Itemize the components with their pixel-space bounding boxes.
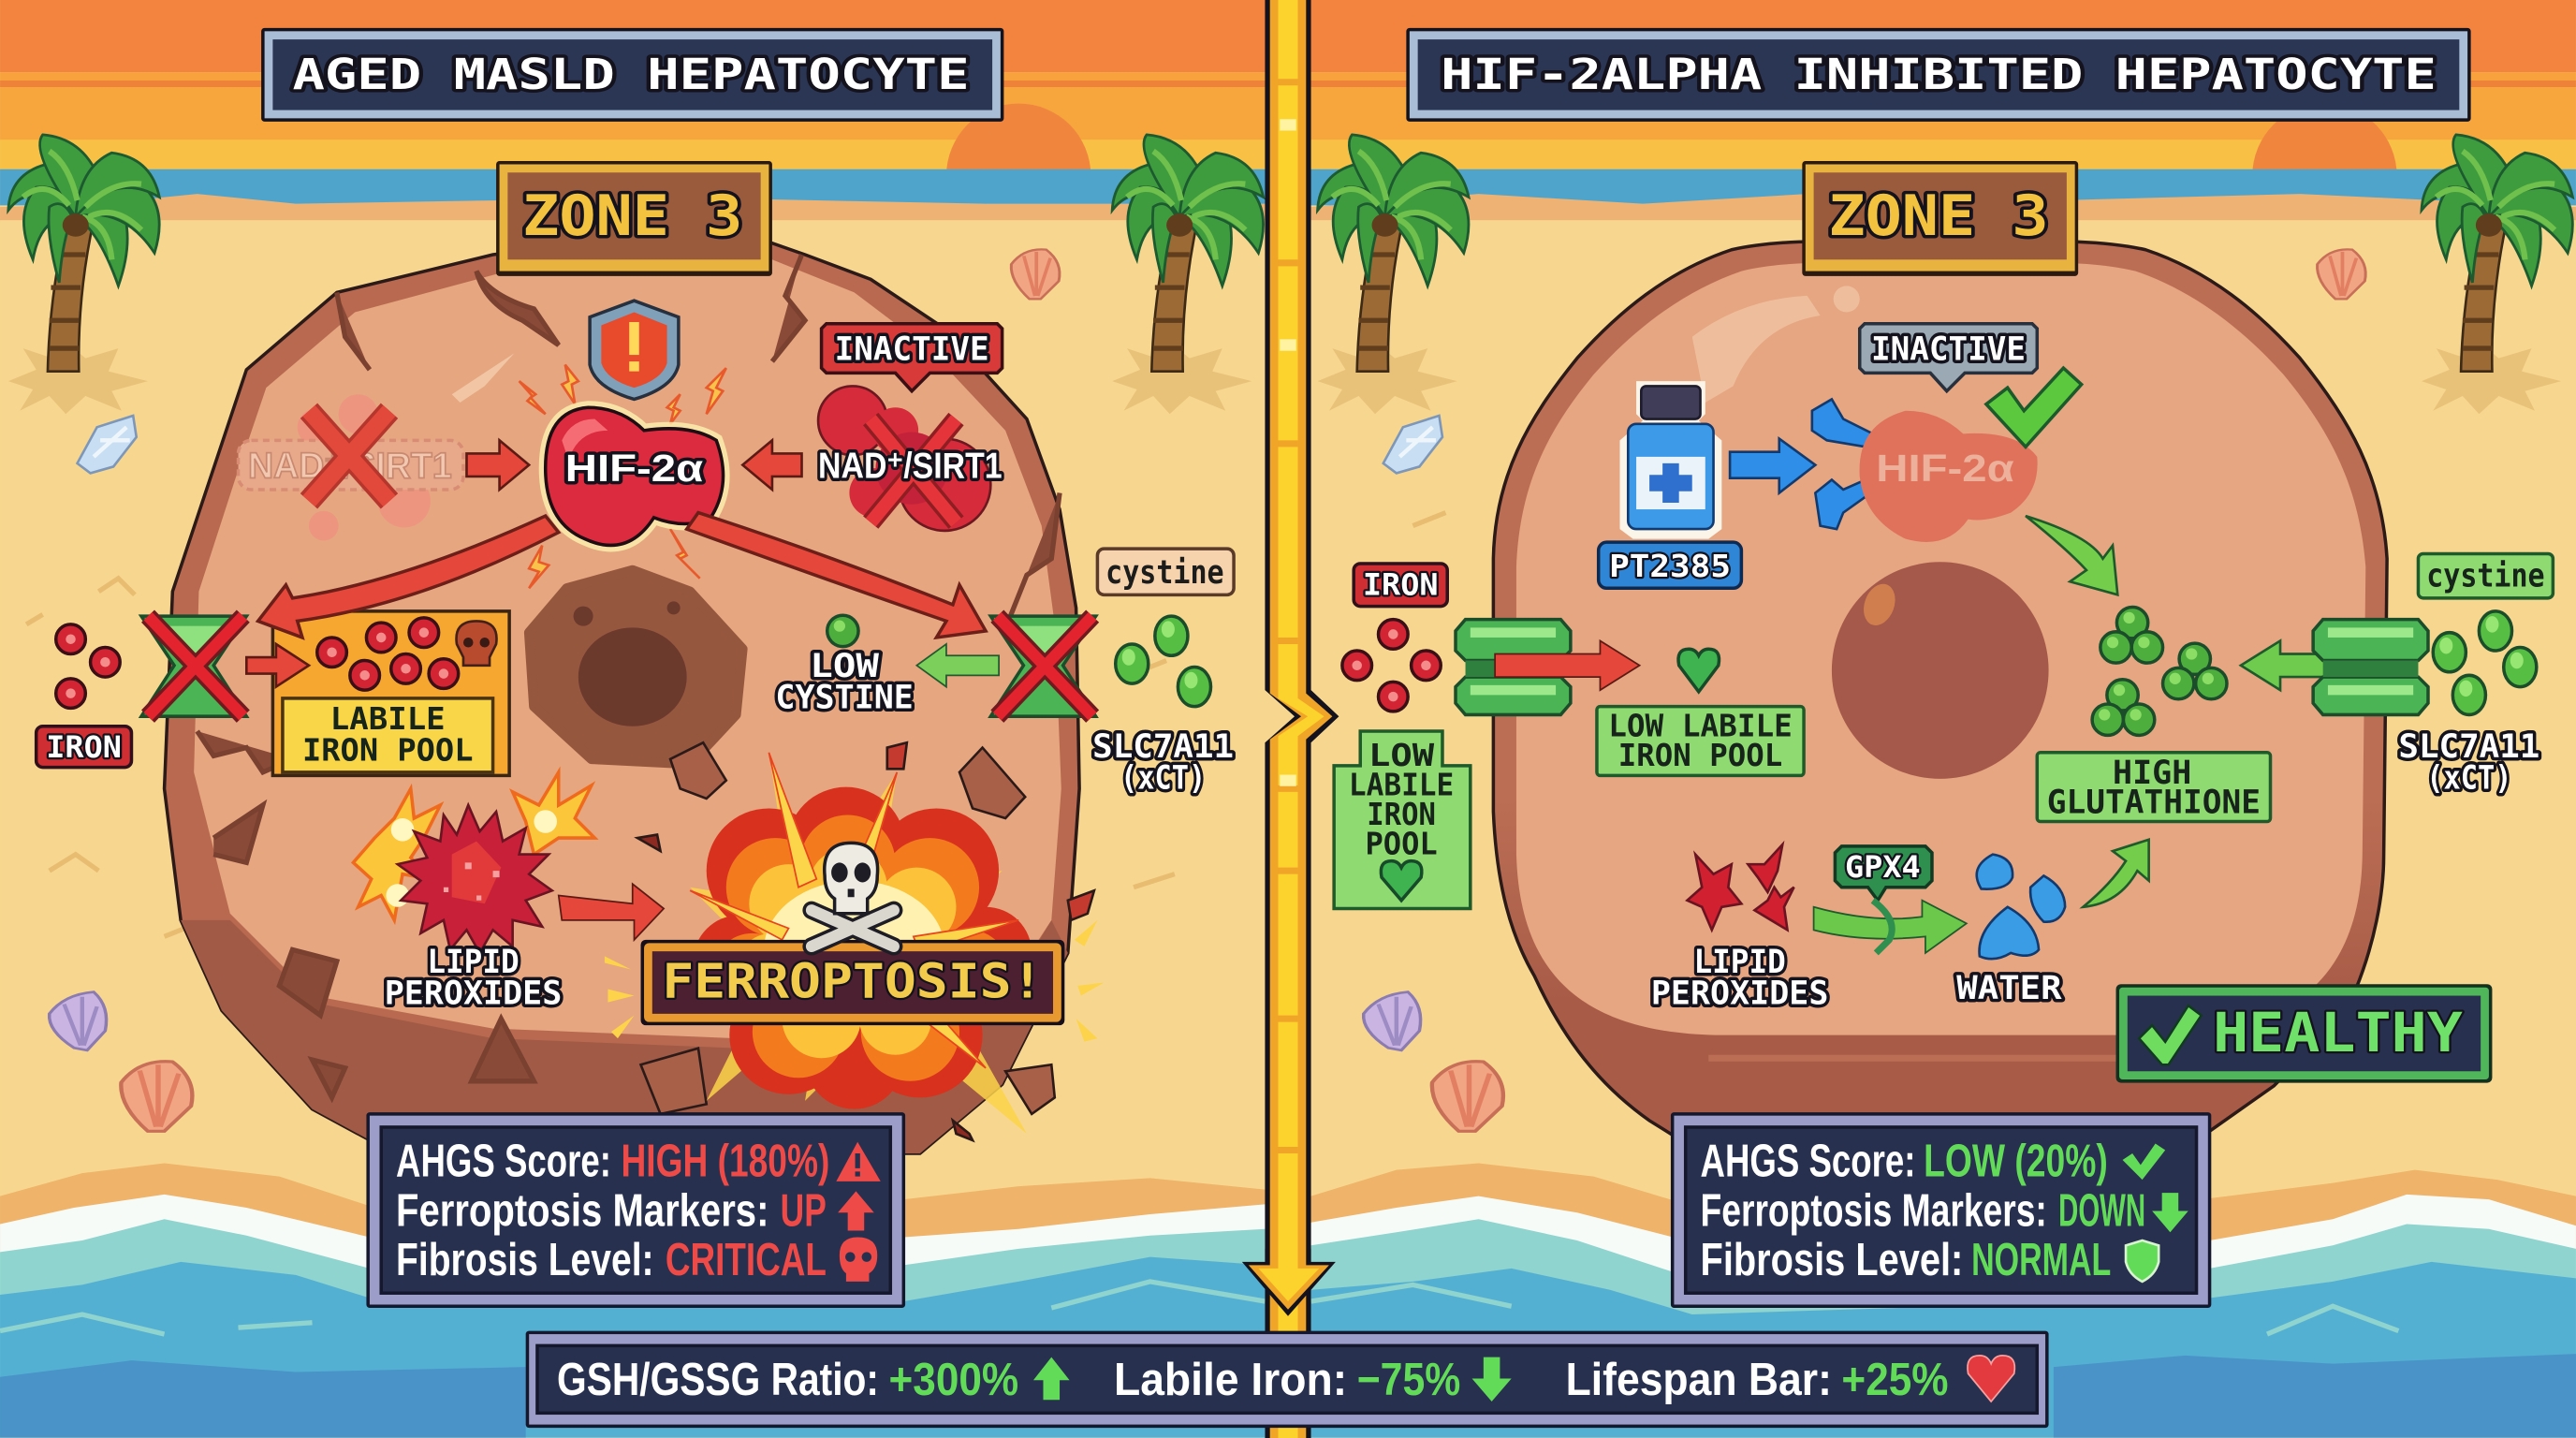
inhibitor fragments <box>1812 399 1873 529</box>
ghost NAD+/SIRT1: inactive <box>239 394 463 540</box>
labile iron pool panel: IRON POOL <box>302 732 474 769</box>
HIF-2 alpha active blob: HIF-2α <box>565 447 703 490</box>
arrow: cystine import <box>2241 640 2341 690</box>
arrow: HIF to cystine transporter <box>687 513 986 638</box>
arrow: iron into pool <box>246 644 309 687</box>
bottom summary bar: +25% <box>1841 1355 1949 1405</box>
LIPID PEROXIDES label left: LIPID <box>427 943 520 981</box>
LOW LABILE IRON POOL label <box>1597 707 1804 775</box>
palm tree far right <box>2422 135 2572 414</box>
healthy iron transporter <box>1456 620 1571 714</box>
left title banner <box>261 28 1003 122</box>
HIGH GLUTATHIONE label: GLUTATHIONE <box>2047 784 2261 822</box>
rocks debris <box>637 742 1094 1140</box>
bottom summary bar: −75% <box>1357 1355 1460 1405</box>
icon: red skull <box>840 1238 877 1282</box>
icon: down arrow green <box>2152 1193 2188 1232</box>
cell body: cracked membrane <box>165 238 1079 1153</box>
damaged nucleus <box>529 570 742 764</box>
left stats panel: UP <box>781 1185 827 1236</box>
panel: aged MASLD hepatocyte cell <box>37 238 1234 1153</box>
right stats panel: Ferroptosis Markers: <box>1701 1185 2047 1236</box>
icon: green heart <box>1678 649 1720 692</box>
water droplets <box>1977 855 2065 959</box>
HIF-2 alpha dimmed blob <box>1860 411 2038 542</box>
LOW LABILE IRON POOL label: LOW LABILE <box>1608 707 1793 743</box>
LOW LABILE IRON POOL label: IRON POOL <box>1618 737 1782 773</box>
ZONE 3 badge right: ZONE 3 <box>1828 184 2049 249</box>
SLC7A11 label <box>1092 727 1234 797</box>
bottom summary bar: Labile Iron: <box>1114 1355 1347 1405</box>
arrow: NAD+/SIRT1 to HIF <box>466 440 529 490</box>
GPX4 badge <box>1835 846 1932 953</box>
right stats panel <box>1671 1112 2211 1308</box>
right title banner <box>1406 28 2471 122</box>
IRON label right: IRON <box>1363 568 1439 602</box>
arrow: reduced iron import <box>1495 640 1640 690</box>
LIPID PEROXIDES label right: LIPID <box>1693 943 1786 981</box>
HIGH GLUTATHIONE label: HIGH <box>2113 754 2191 792</box>
side panel: low labile iron pool: LOW <box>1368 737 1435 773</box>
panel: HIF-2alpha inhibited hepatocyte cell <box>1334 242 2553 1137</box>
HEALTHY badge <box>2116 984 2492 1083</box>
seashells <box>50 249 2365 1131</box>
iron particles <box>56 624 120 708</box>
side panel: low labile iron pool <box>1334 731 1471 909</box>
arrow: GPX4 converts peroxides to water <box>1814 901 1967 953</box>
GPX4 badge: GPX4 <box>1845 851 1921 885</box>
low cystine: LOW <box>810 647 880 685</box>
LIPID PEROXIDES label right: PEROXIDES <box>1651 974 1828 1012</box>
side panel: low labile iron pool: POOL <box>1365 826 1438 862</box>
right stats panel: NORMAL <box>1971 1235 2111 1285</box>
bottom summary bar <box>526 1331 2049 1428</box>
left stats panel: HIGH (180%) <box>621 1137 829 1187</box>
LIPID PEROXIDES label right <box>1651 943 1828 1012</box>
right stats panel: AHGS Score: <box>1701 1137 1915 1187</box>
left title banner: AGED MASLD HEPATOCYTE <box>292 50 970 99</box>
IRON label: IRON <box>46 731 122 765</box>
LIPID PEROXIDES label left <box>385 943 562 1012</box>
iron particles right <box>1342 620 1441 712</box>
INACTIVE badge red: INACTIVE <box>835 330 989 368</box>
bottom summary bar: GSH/GSSG Ratio: <box>557 1355 879 1405</box>
icon: green shield <box>2126 1240 2159 1282</box>
side panel: low labile iron pool: IRON <box>1367 796 1436 832</box>
arrow: HIF inhibition to glutathione <box>2026 516 2117 594</box>
icon: warning shield <box>590 301 679 399</box>
INACTIVE badge grey: INACTIVE <box>1871 330 2026 368</box>
NAD+/SIRT1 dimmed blob with X: NAD⁺/SIRT1 <box>818 447 1003 487</box>
PT2385 label <box>1599 542 1741 588</box>
big green check <box>1986 368 2082 447</box>
icon: green check <box>2123 1143 2165 1180</box>
right stats panel: Fibrosis Level: <box>1701 1235 1963 1285</box>
ZONE 3 badge right <box>1802 161 2078 276</box>
arrow: cystine weak <box>916 644 999 687</box>
ferroptosis explosion <box>690 753 1032 1134</box>
IRON label right <box>1354 564 1447 607</box>
palm tree right panel left <box>1318 135 1469 414</box>
glutathione clusters <box>2092 607 2227 735</box>
icon: red heart <box>1968 1356 2014 1401</box>
left stats panel: AHGS Score: <box>396 1137 611 1187</box>
arrow: right NAD to HIF <box>742 440 802 490</box>
INACTIVE badge red <box>822 324 1003 391</box>
palm tree far left <box>8 135 159 414</box>
healthy cystine transporter <box>2313 620 2428 714</box>
arrow: HIF to iron transporter <box>258 516 559 638</box>
cystine particles right <box>2433 611 2537 714</box>
SLC7A11 label: (xCT) <box>1120 758 1206 797</box>
NAD+/SIRT1 dimmed blob with X <box>818 386 1003 531</box>
ZONE 3 badge left: ZONE 3 <box>522 184 742 249</box>
cystine label: cystine <box>1105 553 1224 592</box>
palm tree left panel right <box>1112 135 1264 414</box>
cystine particles <box>1116 616 1211 707</box>
INACTIVE badge grey <box>1860 324 2037 391</box>
ghost NAD+/SIRT1: inactive: NAD⁺/SIRT1 <box>248 447 452 487</box>
arrow: water to glutathione <box>2083 840 2149 907</box>
arrow: drug to HIF <box>1730 439 1815 493</box>
IRON label <box>37 726 131 768</box>
side panel: low labile iron pool: LABILE <box>1349 766 1454 802</box>
blocked iron transporter <box>141 616 246 716</box>
cell body: healthy membrane <box>1493 242 2387 1137</box>
PT2385 label: PT2385 <box>1609 548 1731 584</box>
SLC7A11 label: SLC7A11 <box>1092 727 1234 766</box>
healthy nucleus <box>1832 562 2049 779</box>
right stats panel: LOW (20%) <box>1924 1137 2108 1187</box>
right stats panel: DOWN <box>2058 1185 2145 1236</box>
FERROPTOSIS banner: FERROPTOSIS! <box>662 954 1044 1009</box>
SLC7A11 label right: SLC7A11 <box>2398 727 2539 766</box>
bottom summary bar: +300% <box>889 1355 1018 1405</box>
icon: green down arrow <box>1472 1357 1512 1401</box>
bottom summary bar: Lifespan Bar: <box>1566 1355 1832 1405</box>
left stats panel <box>366 1112 905 1308</box>
blocked cystine transporter <box>990 616 1096 716</box>
FERROPTOSIS banner <box>641 940 1064 1025</box>
SLC7A11 label right <box>2398 727 2539 797</box>
center gold divider <box>1242 0 1339 1438</box>
icon: lightning sparks <box>520 365 726 588</box>
cystine label green: cystine <box>2426 557 2545 595</box>
left stats panel: Ferroptosis Markers: <box>396 1185 768 1236</box>
left stats panel: Fibrosis Level: <box>396 1235 654 1285</box>
WATER label: WATER <box>1956 969 2063 1007</box>
low cystine: CYSTINE <box>775 678 914 716</box>
HIF-2 alpha dimmed blob: HIF-2α <box>1876 447 2014 490</box>
icon: up arrow red <box>838 1191 874 1231</box>
yellow sparks <box>605 920 1104 1042</box>
arrow: peroxides to ferroptosis <box>559 884 664 940</box>
icon: green up arrow <box>1033 1357 1070 1400</box>
HIGH GLUTATHIONE label <box>2037 753 2271 822</box>
right title banner: HIF-2ALPHA INHIBITED HEPATOCYTE <box>1441 50 2437 99</box>
icon: warning triangle <box>836 1142 881 1181</box>
LIPID PEROXIDES label left: PEROXIDES <box>385 974 562 1012</box>
HEALTHY badge: HEALTHY <box>2213 1001 2463 1064</box>
HIF-2 alpha active blob <box>546 407 724 545</box>
SLC7A11 label right: (xCT) <box>2426 758 2511 797</box>
left stats panel: CRITICAL <box>666 1235 827 1285</box>
low cystine <box>775 615 914 716</box>
icon: PT2385 drug bottle <box>1620 381 1721 539</box>
lipid peroxide burst <box>353 772 594 953</box>
labile iron pool panel: LABILE <box>330 700 446 737</box>
lipid peroxide fragments <box>1687 844 1794 930</box>
labile iron pool panel <box>272 611 509 775</box>
ZONE 3 badge left <box>496 161 772 276</box>
icon: skull and crossbones <box>812 843 894 946</box>
